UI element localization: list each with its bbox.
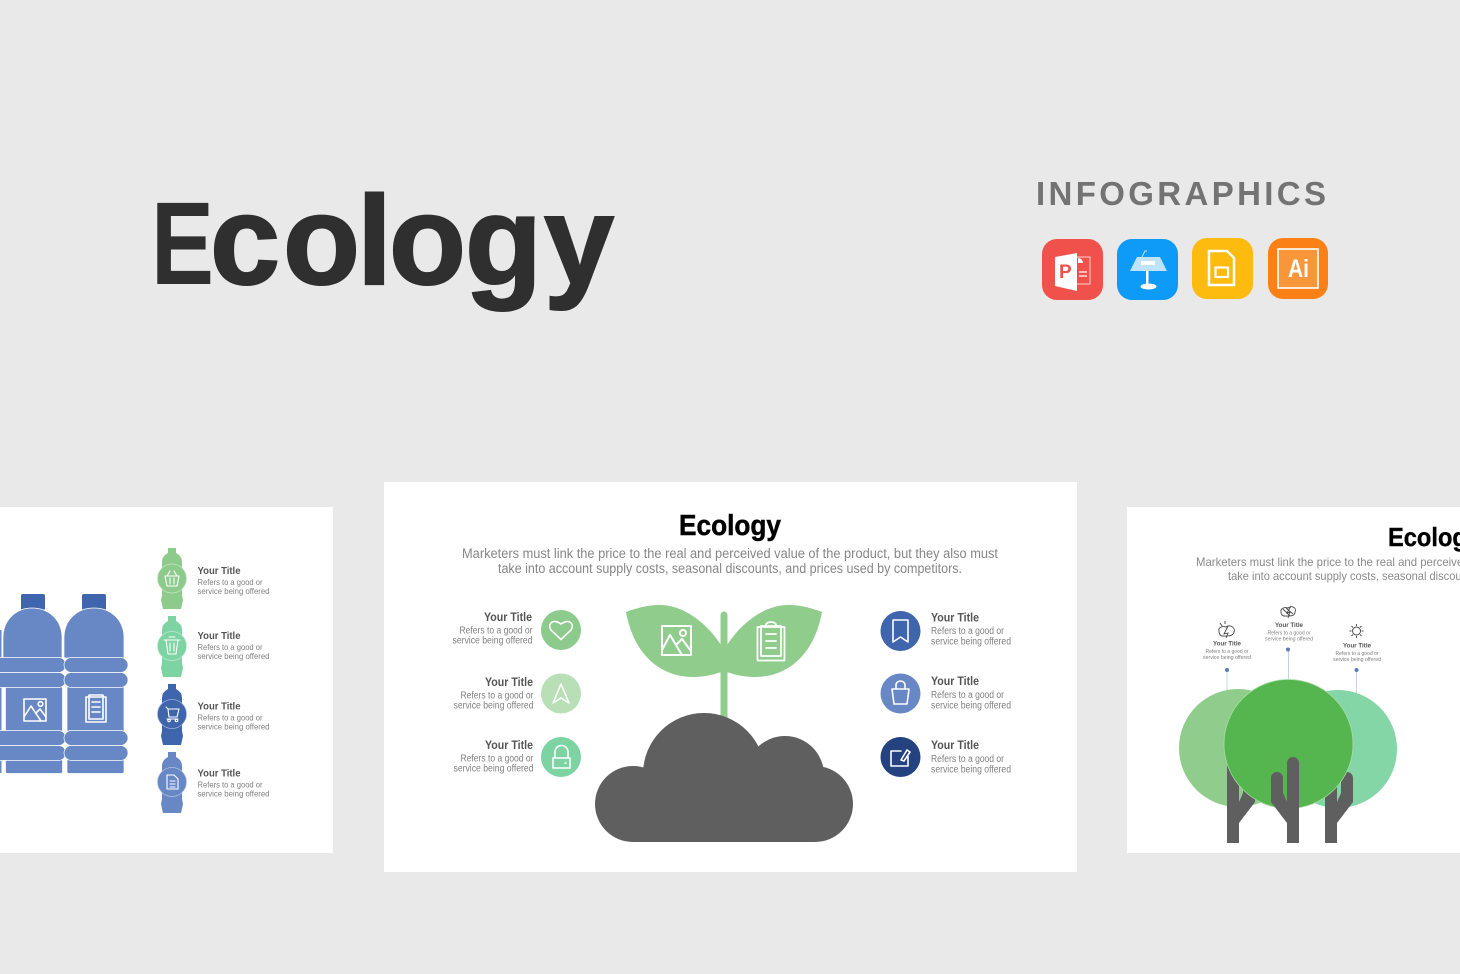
callout: left tree: Your Title [1213, 640, 1241, 648]
item: bag: Refers to a good or [931, 690, 1005, 701]
icon: image on bottle [24, 699, 46, 721]
text: bottle item 2: Your Title [198, 630, 241, 642]
icon: PowerPoint app: P [1059, 262, 1072, 283]
callout: center tree: service being offered [1265, 636, 1313, 642]
item: heart [452, 610, 581, 650]
callout: center tree [1265, 606, 1313, 652]
item: heart: Your Title [484, 610, 532, 624]
item: edit: service being offered [931, 764, 1011, 776]
icon: Illustrator app [1268, 238, 1328, 299]
icon: Keynote app [1117, 239, 1178, 300]
slide description: Marketers must link the price to the real and perceived value of the product, but they also must [462, 546, 998, 561]
item: navigation arrow: Your Title [485, 675, 533, 689]
small bottle: green [158, 548, 186, 609]
text: bottle item 4: Your Title [198, 768, 241, 780]
item: bookmark: Your Title [931, 610, 979, 624]
text: bottle item 1: Your Title [198, 565, 241, 577]
cloud [595, 713, 853, 842]
item: padlock [454, 737, 581, 777]
item: navigation arrow [454, 674, 581, 714]
icon: image on leaf [662, 626, 691, 655]
icon: Illustrator app: Ai [1288, 255, 1309, 283]
callout: center tree: Your Title [1275, 622, 1303, 629]
item: padlock: Refers to a good or [460, 754, 534, 764]
callout: center tree: Refers to a good or [1268, 630, 1311, 636]
item: heart: service being offered [452, 636, 532, 646]
callout: right tree [1333, 624, 1381, 672]
callout: right tree: Refers to a good or [1336, 651, 1379, 657]
callout: left tree: Refers to a good or [1206, 649, 1249, 655]
callout: left tree: service being offered [1203, 655, 1251, 661]
item: bookmark: Refers to a good or [931, 626, 1005, 637]
callout: left tree [1203, 621, 1251, 672]
item: padlock: service being offered [454, 764, 534, 774]
small bottle: dark blue [158, 684, 186, 745]
slide description: take into account supply costs, seasonal discounts, and prices used by competitors. [498, 561, 962, 576]
callout: right tree: Your Title [1343, 642, 1371, 650]
item: bag: Your Title [931, 674, 979, 688]
text: bottle item 3: Refers to a good or [198, 712, 263, 722]
icon: Google Slides app [1192, 238, 1253, 299]
item: edit [880, 737, 1011, 777]
right leaf [727, 605, 822, 677]
item: edit: Refers to a good or [931, 754, 1005, 765]
text: bottle item 2: service being offered [198, 651, 270, 661]
connector lines [1227, 650, 1356, 694]
item: navigation arrow: Refers to a good or [460, 690, 534, 702]
small bottle: mid blue [158, 752, 186, 813]
icon: clipboard on leaf [758, 622, 784, 660]
text: bottle item 1 [198, 565, 270, 596]
panel: left slide [0, 507, 333, 853]
item: bookmark: service being offered [931, 636, 1011, 648]
text: bottle item 2: Refers to a good or [198, 642, 263, 652]
text: bottle item 3 [198, 700, 270, 732]
text: bottle item 3: service being offered [198, 722, 270, 732]
heading: INFOGRAPHICS: INFOGRAPHICS [1036, 175, 1326, 212]
item: bag [880, 674, 1011, 714]
item: bag: service being offered [931, 700, 1011, 712]
panel: right slide [1127, 507, 1460, 853]
text: bottle item 1: service being offered [198, 586, 270, 596]
hand: left [1227, 757, 1255, 843]
tree crown: right [1279, 690, 1397, 808]
text: bottle item 4: service being offered [198, 788, 270, 798]
large bottles [0, 594, 128, 774]
text: bottle item 1: Refers to a good or [198, 577, 263, 587]
slide description [462, 546, 998, 576]
hand: right [1325, 757, 1353, 843]
text: bottle item 2 [198, 630, 270, 661]
left leaf [626, 605, 721, 677]
tree crown: left [1179, 689, 1297, 807]
item: navigation arrow: service being offered [454, 700, 534, 712]
hand: center [1271, 757, 1299, 843]
icon: PowerPoint app [1042, 239, 1103, 300]
slide heading: Ecology [679, 510, 781, 542]
icon: clipboard on bottle [86, 695, 106, 722]
slide description [1196, 555, 1460, 583]
text: bottle item 4: Refers to a good or [198, 780, 263, 790]
item: bookmark [880, 610, 1011, 651]
text: bottle item 4 [198, 768, 270, 798]
item: heart: Refers to a good or [460, 626, 533, 636]
title: Ecology: cology [210, 170, 614, 311]
tree crown: center [1224, 680, 1353, 808]
panel: center slide [384, 482, 1077, 872]
text: bottle item 3: Your Title [198, 700, 241, 712]
sprout stem [720, 612, 728, 725]
item: edit: Your Title [931, 738, 979, 752]
item: padlock: Your Title [485, 738, 533, 752]
small bottle: teal [158, 616, 186, 677]
title: Ecology: E [151, 177, 214, 309]
callout: right tree: service being offered [1333, 657, 1381, 663]
